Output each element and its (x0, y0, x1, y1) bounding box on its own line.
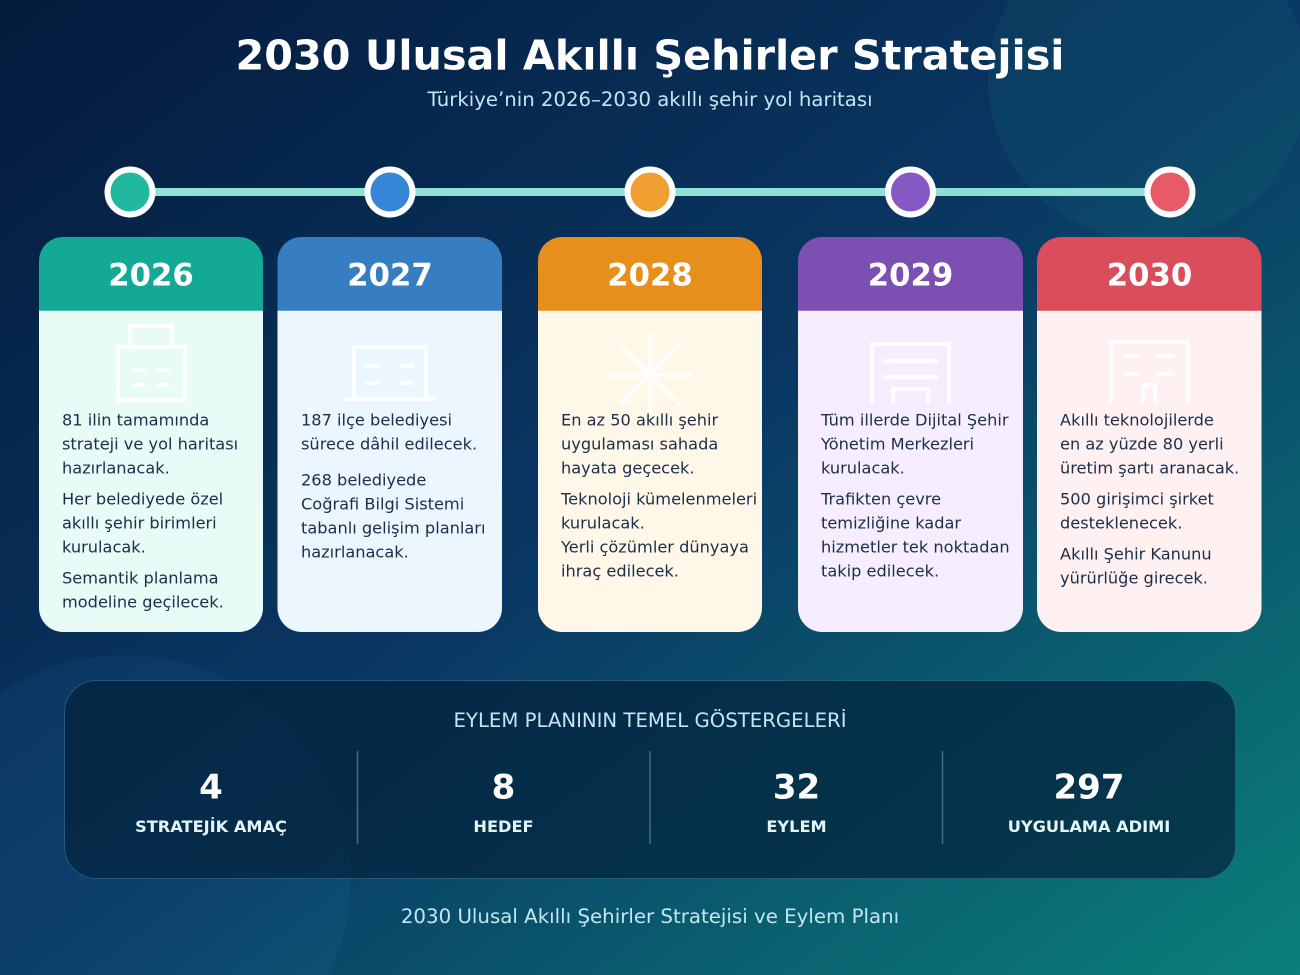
stat: 297: 297 (1054, 768, 1124, 808)
text: 2026: modeline geçilecek. (62, 592, 224, 612)
text: 2028: kurulacak. (561, 514, 645, 532)
text: 2029: takip edilecek. (821, 562, 939, 580)
icon: building with roof (118, 326, 185, 400)
text: 2029: temizliğine kadar (821, 514, 961, 532)
text: 2028: hayata geçecek. (561, 458, 695, 478)
icon: service centre (872, 344, 949, 401)
text: 2027: 268 belediyede (301, 470, 426, 490)
stat: 4 (135, 768, 287, 836)
icon: tower (1111, 342, 1188, 401)
text: 2030: 500 girişimci şirket (1060, 490, 1214, 508)
text: 2027: Coğrafi Bilgi Sistemi (301, 494, 464, 514)
text: 2030: desteklenecek. (1060, 514, 1182, 532)
text: 2030: yürürlüğe girecek. (1060, 568, 1208, 588)
stat: 4: 4 (199, 768, 223, 808)
text: 2027: sürece dâhil edilecek. (301, 434, 477, 454)
year 2026: 2026 (108, 258, 194, 294)
icon: radiating star (610, 335, 690, 415)
timeline node 2028 (628, 170, 672, 214)
text: 2029: Tüm illerde Dijital Şehir (820, 410, 1009, 430)
panel: 2026 (39, 237, 263, 632)
text: 2029: kurulacak. (821, 458, 905, 478)
text: 2028: En az 50 akıllı şehir (561, 410, 719, 430)
timeline node 2027 (368, 170, 412, 214)
text: 2030: en az yüzde 80 yerli (1060, 434, 1224, 454)
stat: 4: STRATEJİK AMAÇ (135, 817, 287, 836)
panel: 2030 (1037, 237, 1262, 632)
text: 2026: Her belediyede özel (62, 490, 223, 508)
text: 2030: Akıllı Şehir Kanunu (1060, 544, 1212, 564)
text: 2028: Teknoloji kümelenmeleri (560, 490, 757, 508)
year 2027: 2027 (347, 258, 433, 294)
text: 2029: Yönetim Merkezleri (820, 434, 974, 454)
year 2029: 2029 (868, 258, 953, 294)
text: 2026: 81 ilin tamamında (62, 410, 209, 430)
text: 2030: üretim şartı aranacak. (1060, 458, 1239, 478)
stat: 32 (766, 768, 827, 836)
indicators heading: EYLEM PLANININ TEMEL GÖSTERGELERİ (453, 709, 847, 732)
text: 2026: strateji ve yol haritası (62, 434, 238, 454)
text: 2030: Akıllı teknolojilerde (1060, 410, 1214, 430)
title: 2030 Ulusal Akıllı Şehirler Stratejisi (236, 32, 1064, 80)
stat: 8: HEDEF (473, 817, 534, 836)
year 2030: 2030 (1107, 258, 1192, 294)
text: 2026: hazırlanacak. (62, 458, 170, 478)
stat: 32: 32 (773, 768, 820, 808)
text: 2026: Semantik planlama (62, 568, 219, 588)
timeline node 2030 (1148, 170, 1192, 214)
timeline (108, 170, 1192, 214)
panel: 2027 (278, 237, 502, 632)
text: 2028: uygulaması sahada (561, 434, 718, 454)
text: 2026: akıllı şehir birimleri (62, 514, 217, 532)
year 2028: 2028 (607, 258, 693, 294)
stat: 297 (1008, 768, 1170, 836)
stat: 8: 8 (492, 768, 515, 808)
timeline node 2029 (888, 170, 933, 214)
subtitle: Türkiye’nin 2026–2030 akıllı şehir yol haritası (426, 88, 873, 111)
footer: 2030 Ulusal Akıllı Şehirler Stratejisi ve Eylem Planı (401, 905, 899, 928)
text: 2027: tabanlı gelişim planları (301, 518, 485, 538)
text: 2028: Yerli çözümler dünyaya (560, 538, 749, 556)
stat: 32: EYLEM (766, 817, 827, 836)
text: 2027: hazırlanacak. (301, 542, 409, 562)
text: 2028: ihraç edilecek. (561, 562, 679, 580)
stat: 297: UYGULAMA ADIMI (1008, 817, 1170, 836)
icon: low building (346, 347, 434, 399)
timeline node 2026 (108, 170, 152, 214)
text: 2027: 187 ilçe belediyesi (301, 410, 452, 430)
panel: 2028 (538, 237, 762, 632)
text: 2029: hizmetler tek noktadan (821, 538, 1010, 556)
stat: 8 (473, 768, 534, 836)
panel: 2029 (798, 237, 1023, 632)
text: 2026: kurulacak. (62, 538, 146, 556)
text: 2029: Trafikten çevre (820, 490, 941, 508)
panel: key indicators (64, 680, 1236, 878)
